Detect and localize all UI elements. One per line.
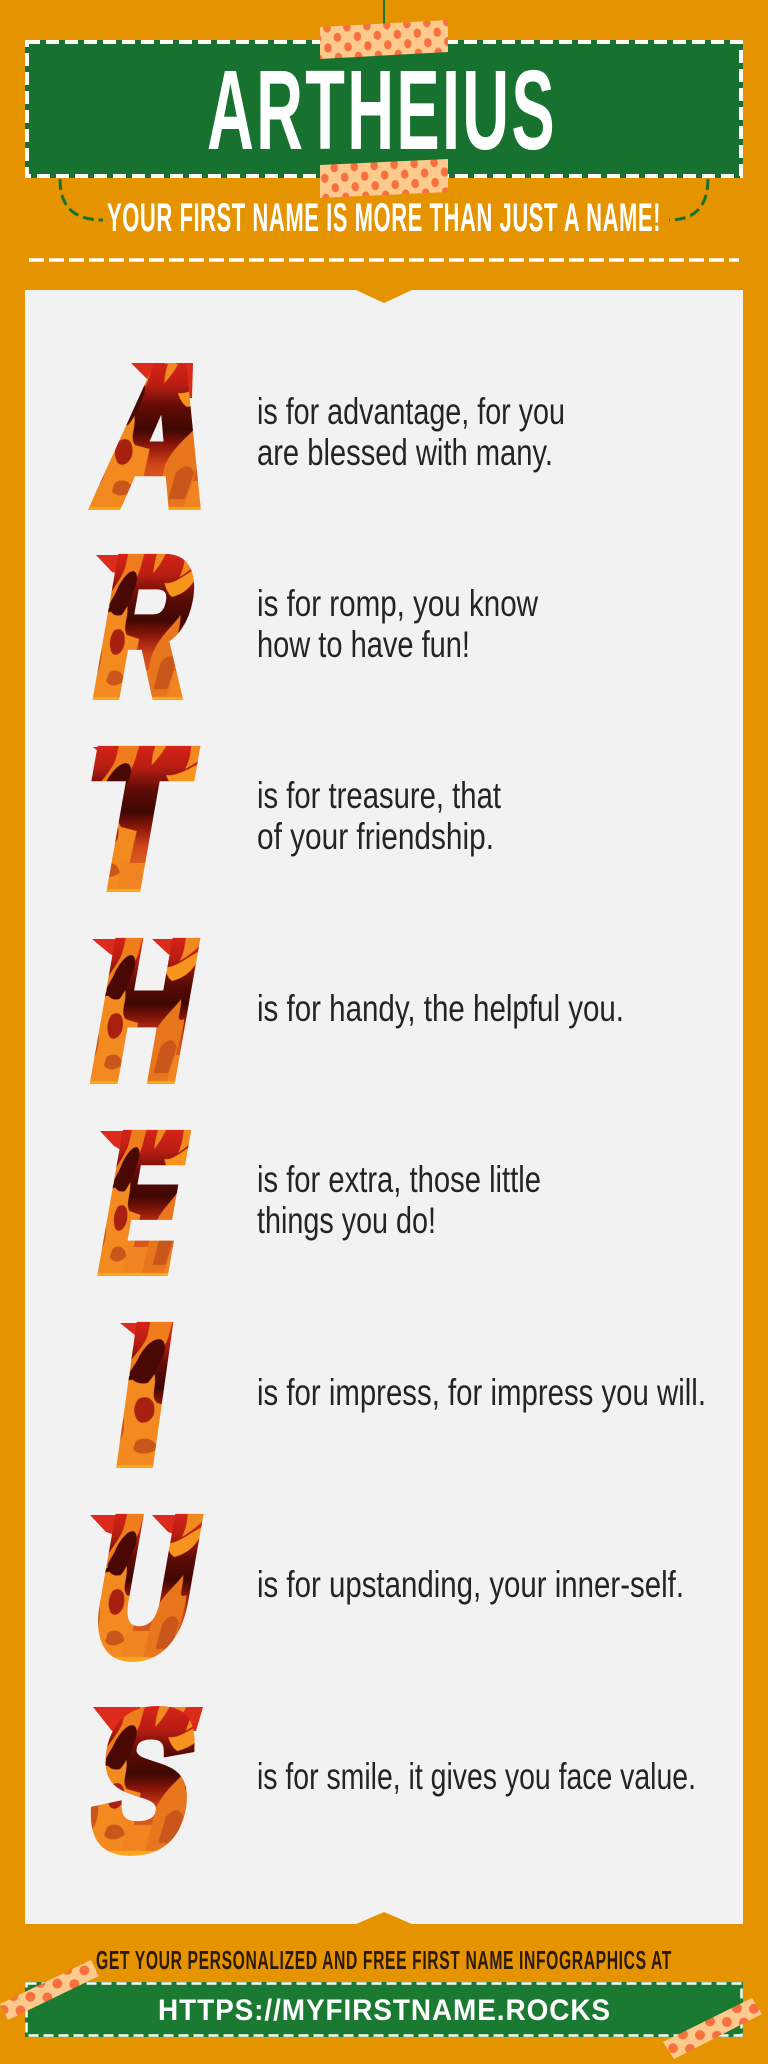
letter T row xyxy=(70,712,502,926)
text E xyxy=(257,1159,541,1241)
letter I row xyxy=(106,1287,706,1502)
letter R row xyxy=(83,519,538,734)
letter U row xyxy=(81,1481,684,1695)
fire letter H: H xyxy=(80,903,211,1118)
bottom tape xyxy=(320,159,448,198)
text R xyxy=(257,583,538,665)
text E: things you do! xyxy=(257,1200,436,1241)
connector left xyxy=(60,179,103,220)
fire letter I: I xyxy=(106,1287,183,1502)
text T: is for treasure, that xyxy=(257,775,502,816)
letter E row xyxy=(88,1095,541,1310)
fire letter A: A xyxy=(86,330,229,544)
letter S row xyxy=(79,1673,696,1888)
footer xyxy=(0,1945,762,2059)
text T xyxy=(257,775,502,857)
text R: how to have fun! xyxy=(257,624,470,665)
hanging line xyxy=(383,0,385,24)
text A: is for advantage, for you xyxy=(257,391,565,432)
panel background xyxy=(25,290,743,1924)
panel: letters xyxy=(25,290,743,1924)
text E: is for extra, those little xyxy=(257,1159,541,1200)
right tape xyxy=(663,1998,762,2059)
url: HTTPS://MYFIRSTNAME.ROCKS xyxy=(158,1994,611,2027)
left tape xyxy=(0,1960,99,2020)
text T: of your friendship. xyxy=(257,816,494,857)
letter A row xyxy=(86,330,565,544)
text H: is for handy, the helpful you. xyxy=(257,988,624,1029)
text A: are blessed with many. xyxy=(257,432,553,473)
fire letter R: R xyxy=(83,519,209,734)
text A xyxy=(257,391,565,473)
fire letter E: E xyxy=(88,1095,200,1310)
letter H row xyxy=(80,903,624,1118)
footer banner xyxy=(25,1982,743,2037)
fire letter T: T xyxy=(70,712,203,926)
top tape xyxy=(320,20,448,59)
connector right xyxy=(669,179,708,220)
fire letter U: U xyxy=(81,1481,213,1695)
fire letter S: S xyxy=(79,1673,210,1888)
header xyxy=(25,0,743,260)
title banner xyxy=(25,40,743,178)
text R: is for romp, you know xyxy=(257,583,538,624)
